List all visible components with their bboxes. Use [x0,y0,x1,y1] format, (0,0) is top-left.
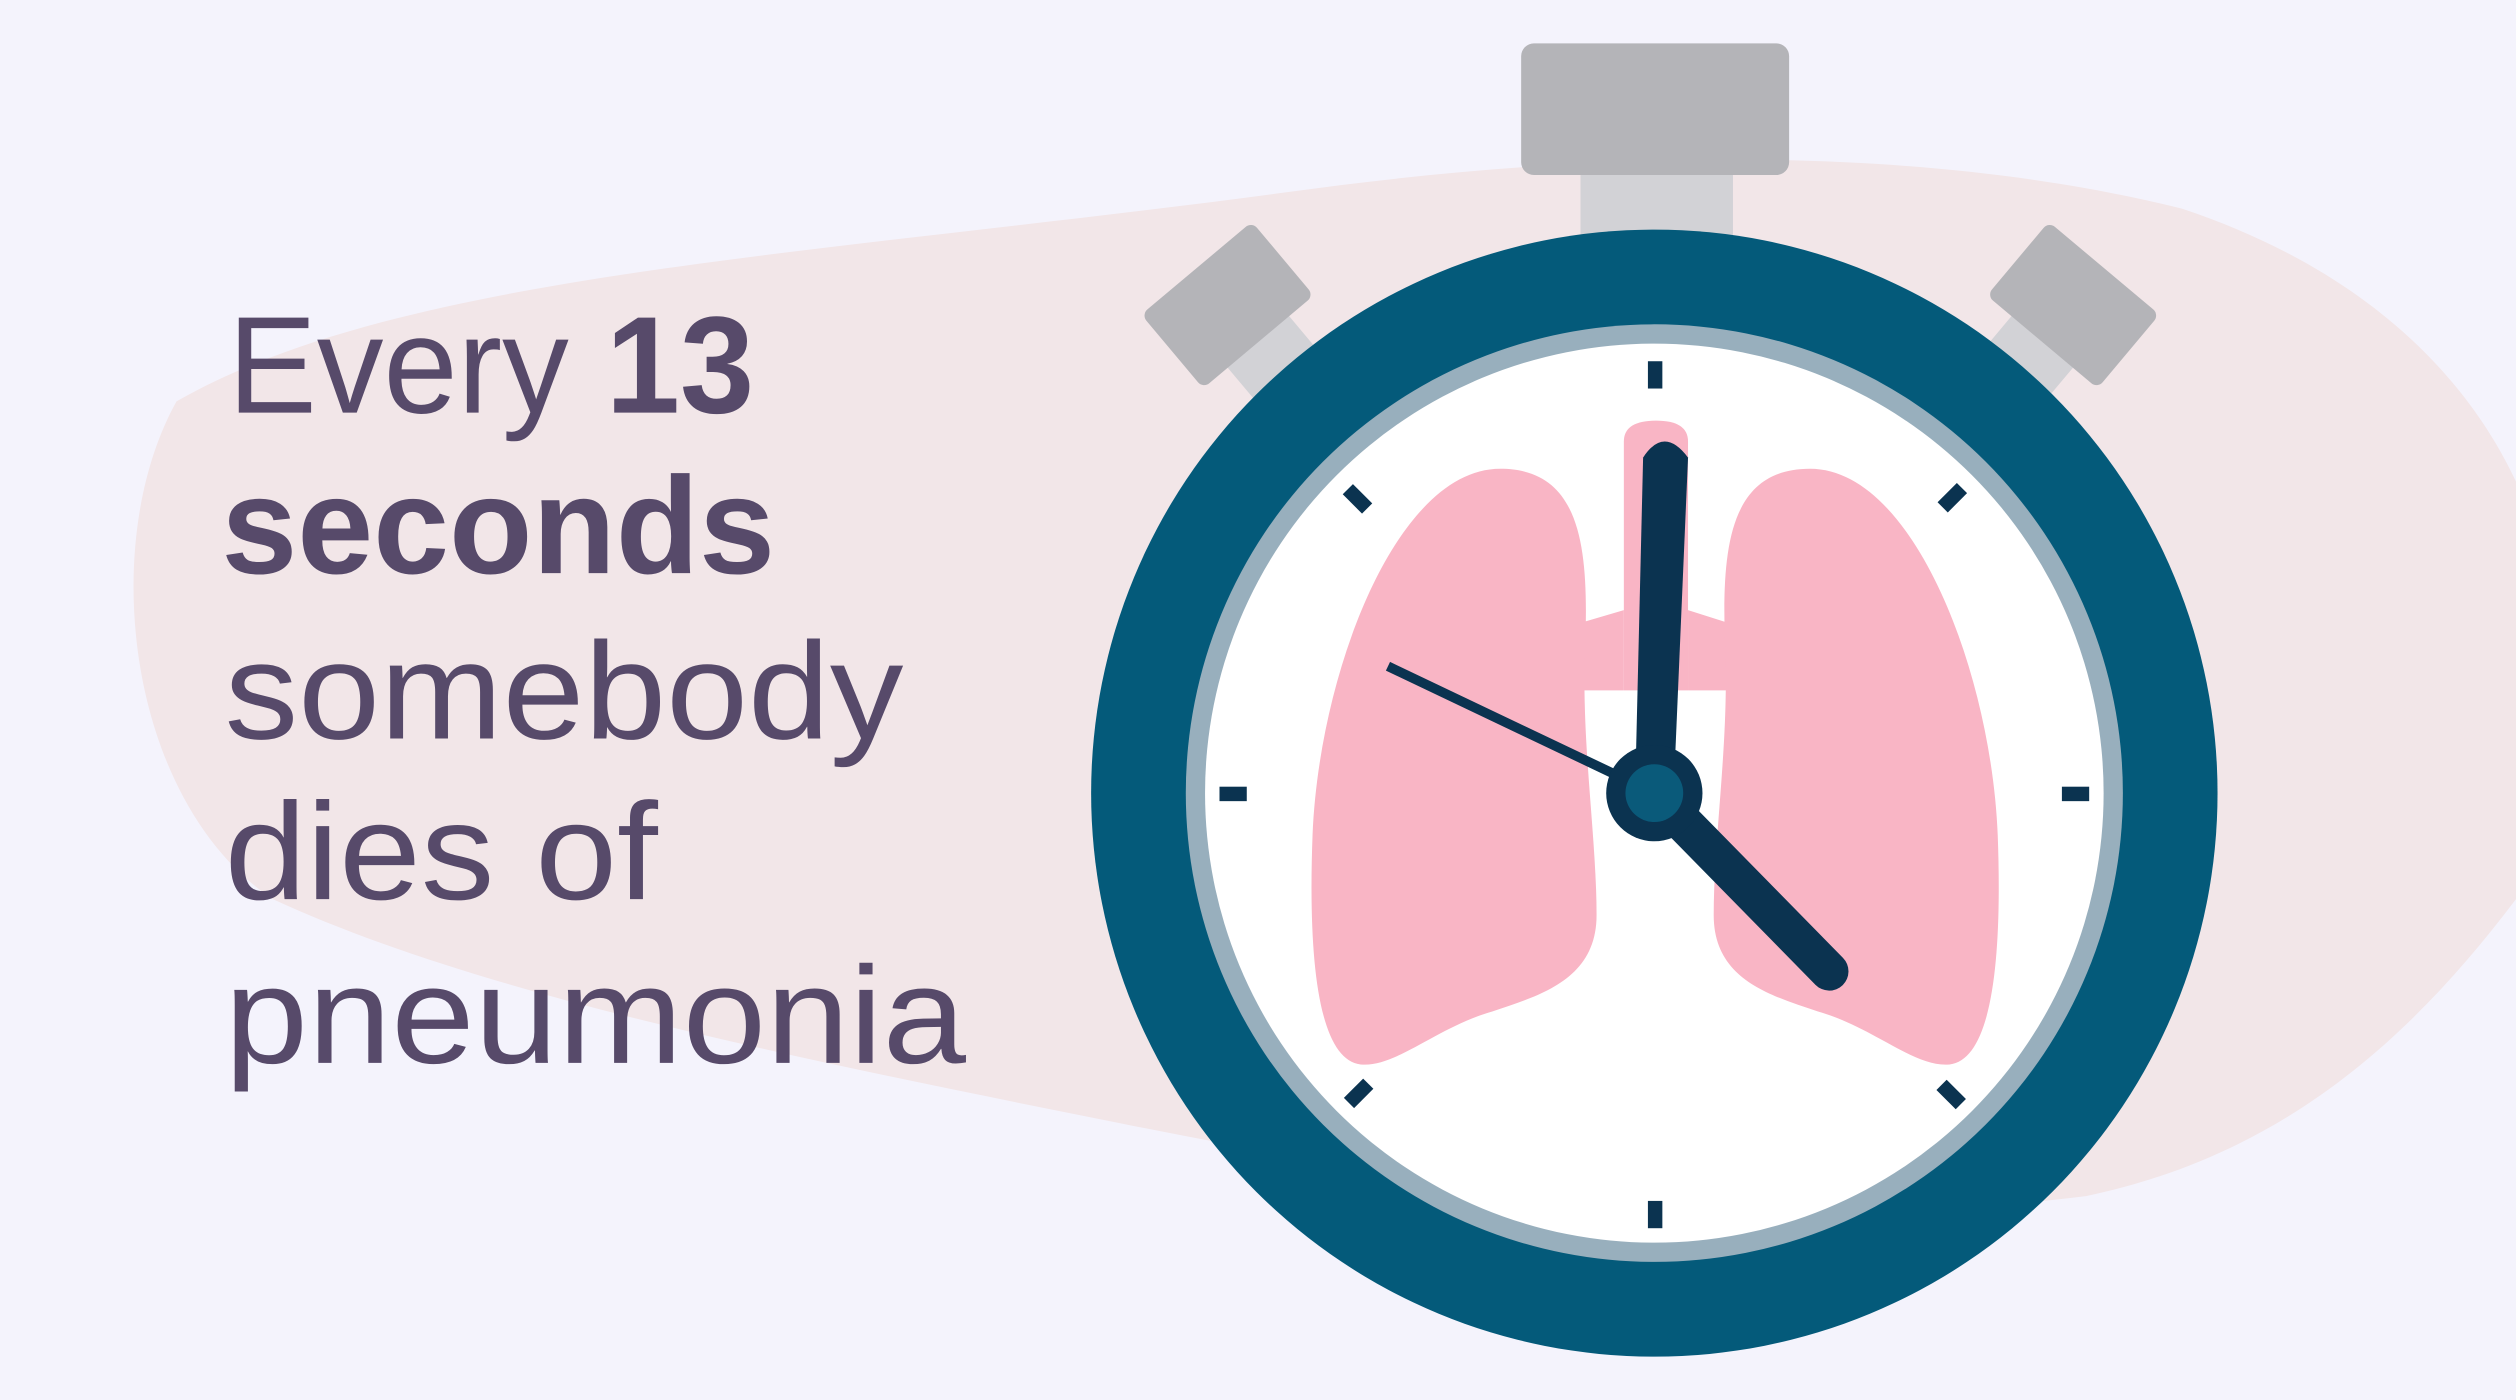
headline text: pneumonia [225,939,966,1093]
clock hands [1388,442,1829,971]
headline text: Every 13 [228,289,754,443]
background blob [134,160,2516,1211]
headline text [221,289,966,1093]
tick marks [1219,361,2089,1228]
top button [1521,43,1789,249]
headline text: seconds [221,449,775,603]
lungs [1312,421,1999,1065]
stopwatch [1091,43,2218,1357]
left button [1141,222,1350,431]
watch body [1091,230,2218,1357]
headline text: somebody [225,614,903,769]
right button [1951,222,2159,431]
headline text: dies of [225,775,659,929]
